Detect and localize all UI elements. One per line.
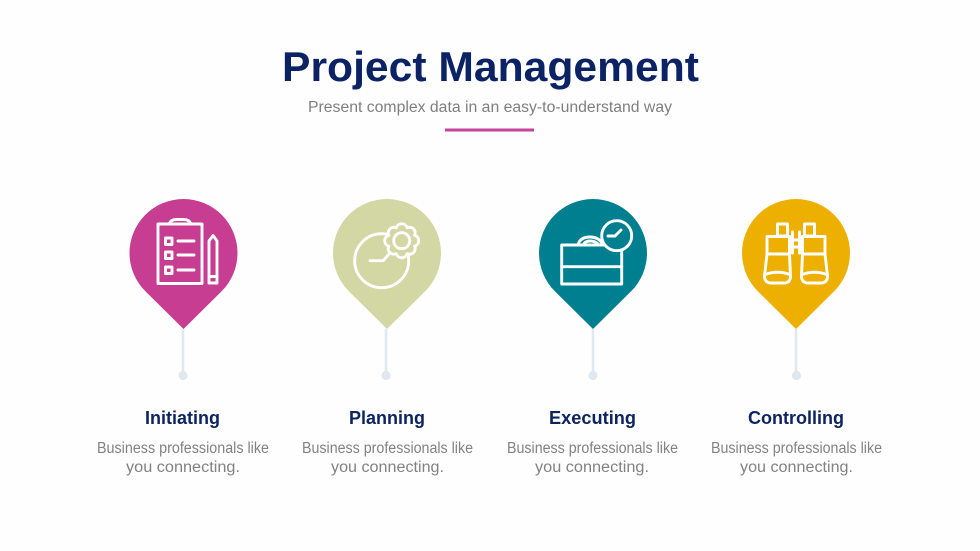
heading: Controlling (748, 407, 844, 428)
connector line (381, 329, 391, 380)
description: Business professionals like (711, 440, 882, 457)
heading: Executing (549, 407, 636, 428)
description: you connecting. (126, 459, 240, 476)
connector line (178, 329, 188, 380)
subtitle: Present complex data in an easy-to-understand way (308, 99, 672, 116)
icon: binoculars (764, 224, 828, 283)
pin (742, 199, 850, 329)
description: you connecting. (535, 459, 649, 476)
pin (539, 199, 647, 329)
title: Project Management (282, 43, 699, 90)
description: you connecting. (740, 459, 853, 476)
description: Business professionals like (97, 440, 269, 457)
panel: initiating (97, 199, 269, 476)
connector line (792, 329, 801, 380)
panel: executing (507, 199, 678, 476)
title underline (445, 128, 534, 132)
description: Business professionals like (302, 440, 473, 457)
panel: planning (302, 199, 473, 476)
icon: briefcase with clock (562, 221, 632, 284)
heading: Planning (349, 407, 425, 428)
heading: Initiating (145, 407, 220, 428)
panel: controlling (711, 199, 882, 476)
connector line (588, 329, 598, 380)
description: you connecting. (331, 459, 444, 476)
pin (333, 199, 441, 329)
icon: clock with gear (355, 224, 419, 288)
icon: clipboard and pencil (158, 220, 217, 284)
description: Business professionals like (507, 440, 678, 457)
pin (130, 199, 237, 329)
